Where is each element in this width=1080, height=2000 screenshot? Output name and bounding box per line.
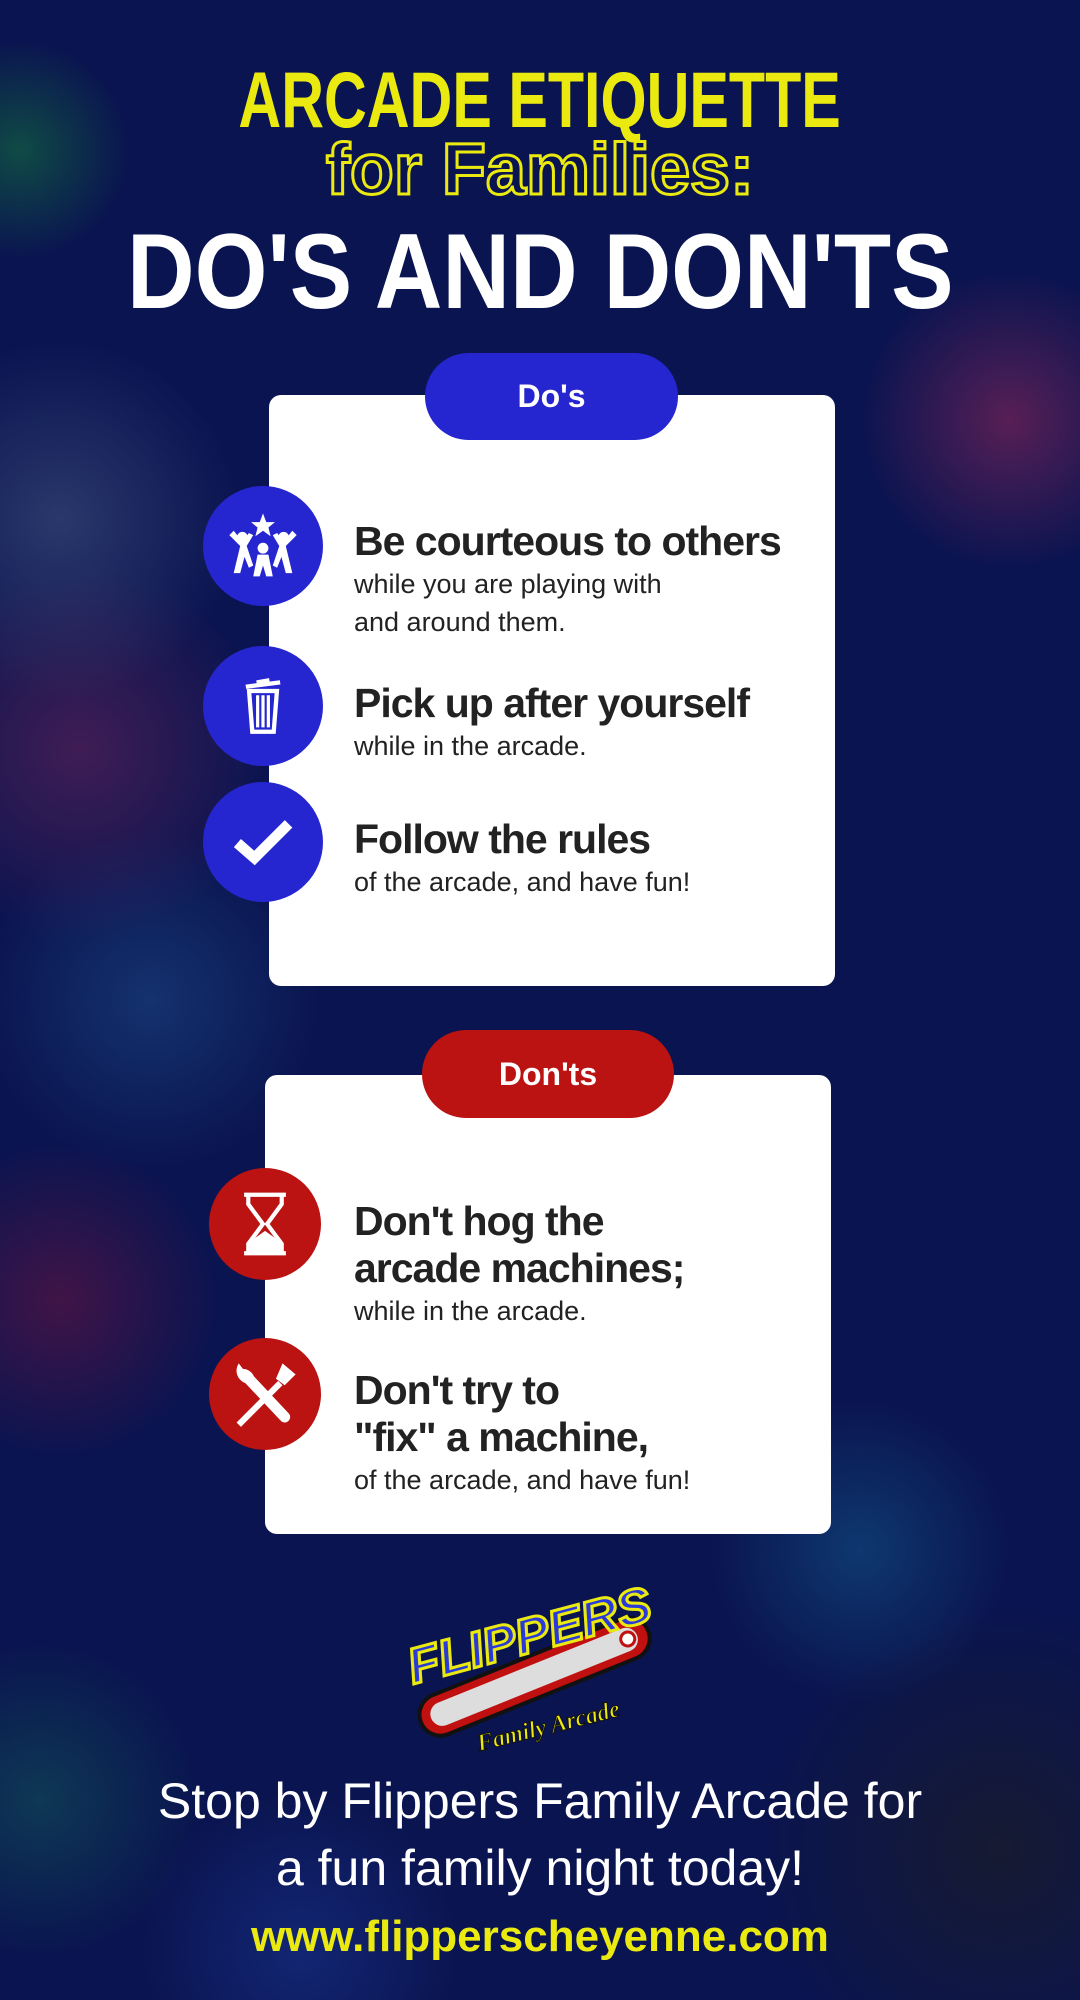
text: don't hog: arcade machines; [354, 1245, 684, 1291]
icon: wrench and screwdriver [209, 1338, 321, 1450]
text: call to action [158, 1773, 922, 1896]
text: follow rules: Follow the rules [354, 816, 650, 862]
logo: flippers family arcade: Family Arcade [473, 1696, 623, 1757]
text: don't fix: "fix" a machine, [354, 1414, 648, 1460]
text: don't hog: Don't hog the [354, 1198, 604, 1244]
panel: do's [269, 395, 835, 986]
text: pick up: while in the arcade. [354, 731, 587, 761]
logo: flippers family arcade: FLIPPERS [401, 1576, 657, 1695]
text: be courteous: while you are playing with [354, 569, 662, 599]
heading: do's and don'ts: DO'S AND DON'TS [127, 211, 953, 331]
logo: flippers family arcade [401, 1576, 657, 1757]
text: call to action: Stop by Flippers Family Arcade for [158, 1773, 922, 1829]
icon: trash can [203, 646, 323, 766]
text: be courteous [354, 518, 781, 637]
icon: checkmark [203, 782, 323, 902]
text: don't fix: of the arcade, and have fun! [354, 1465, 690, 1495]
label: do's pill: Do's [517, 378, 586, 414]
icon: hourglass [209, 1168, 321, 1280]
title: arcade etiquette: ARCADE ETIQUETTE [239, 55, 841, 144]
label: don'ts pill [422, 1030, 674, 1118]
text: don't fix: Don't try to [354, 1367, 559, 1413]
text: don't hog: while in the arcade. [354, 1296, 587, 1326]
text: be courteous: Be courteous to others [354, 518, 781, 564]
panel: don'ts [265, 1075, 831, 1534]
text: follow rules [354, 816, 690, 897]
text: pick up [354, 680, 750, 761]
text: pick up: Pick up after yourself [354, 680, 749, 726]
label: don'ts pill: Don'ts [499, 1056, 597, 1092]
text: follow rules: of the arcade, and have fun! [354, 867, 690, 897]
text: don't fix [354, 1367, 690, 1495]
text: website url: www.flipperscheyenne.com [251, 1912, 829, 1961]
icon: people celebrating [203, 486, 323, 606]
label: do's pill [425, 353, 678, 440]
text: call to action: a fun family night today! [276, 1840, 804, 1896]
text: don't hog [354, 1198, 684, 1326]
text: be courteous: and around them. [354, 607, 566, 637]
